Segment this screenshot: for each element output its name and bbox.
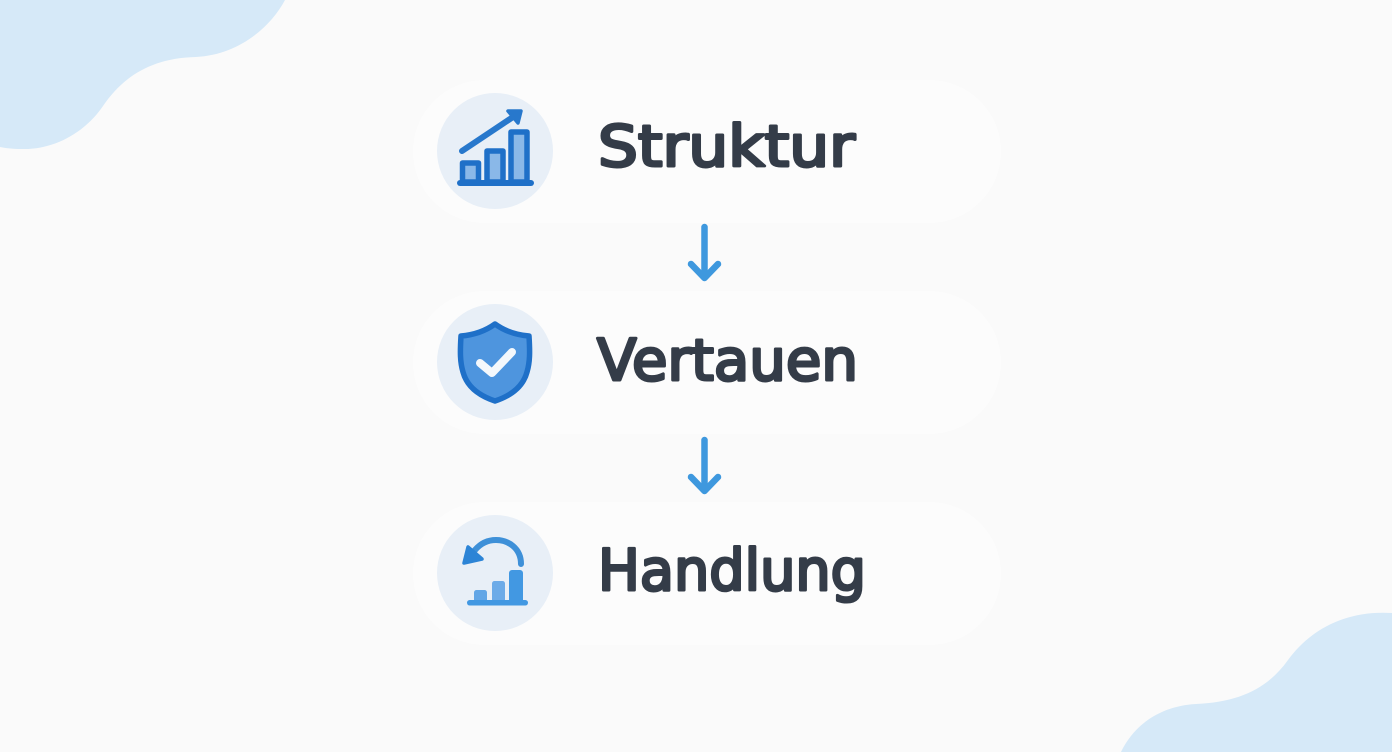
label: Vertrauen: Vertauen — [597, 328, 858, 394]
label: Handlung: Handlung — [598, 538, 866, 604]
arrow: Vertrauen to Handlung — [691, 440, 718, 491]
panel: Struktur pill — [413, 80, 1001, 223]
icon: return arrow over bars — [437, 515, 553, 631]
icon: rising bar chart — [437, 93, 553, 209]
step 1: Struktur — [413, 80, 1001, 223]
step 2: Vertrauen — [413, 291, 1001, 434]
panel: Vertrauen pill — [413, 291, 1001, 434]
label: Struktur: Struktur — [598, 114, 856, 180]
arrow: Struktur to Vertrauen — [691, 227, 718, 278]
icon: shield with check — [437, 304, 553, 420]
decorative blob: top left — [0, 0, 285, 149]
decorative blob: bottom right — [1121, 613, 1392, 752]
panel: Handlung pill — [413, 502, 1001, 645]
step 3: Handlung — [413, 502, 1001, 645]
